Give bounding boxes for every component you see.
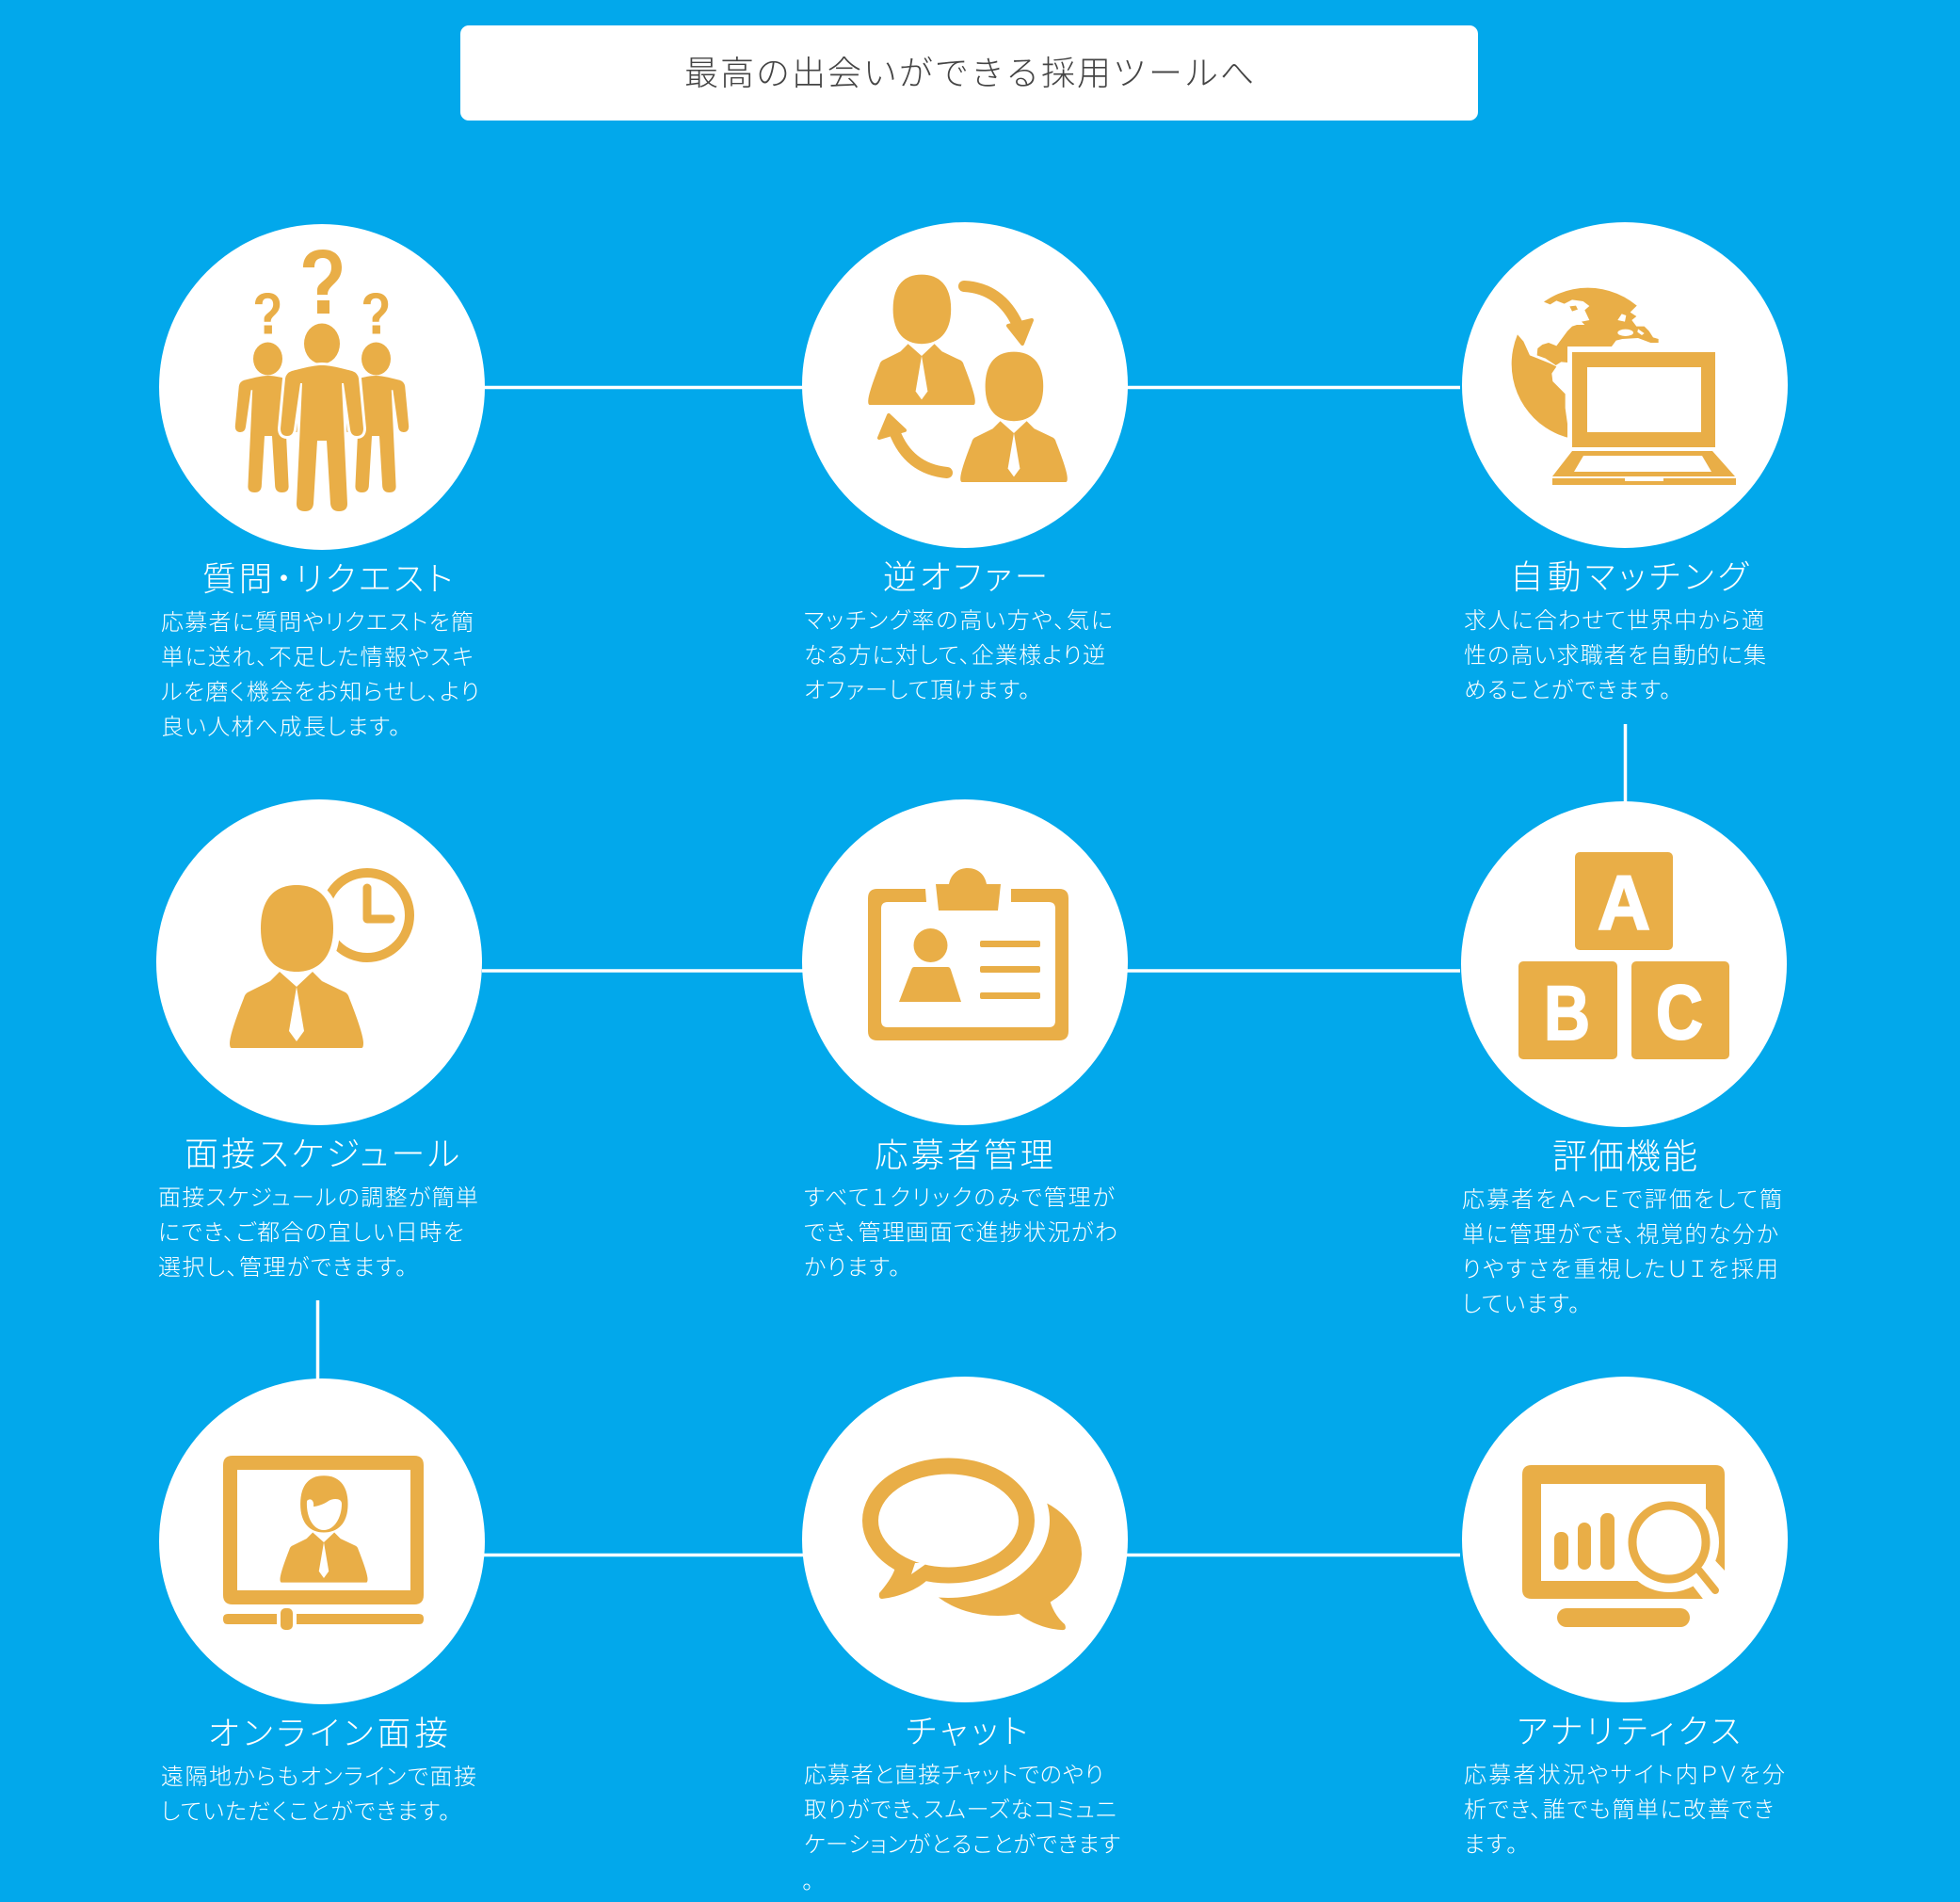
panel: オンライン面接 <box>159 1378 485 1825</box>
panel: 応募者管理 <box>802 799 1128 1281</box>
circle <box>802 222 1128 548</box>
panel: アナリティクス <box>1462 1377 1788 1858</box>
description: でき、管理画面で進捗状況がわ <box>804 1220 1117 1246</box>
heading: オンライン面接 <box>208 1715 448 1752</box>
description: 応募者に質問やリクエストを簡 <box>161 610 474 636</box>
connector lines <box>318 388 1625 1555</box>
icon: ABC blocks <box>1518 852 1729 1059</box>
description <box>802 1763 1120 1894</box>
description: かります。 <box>804 1255 900 1281</box>
heading: 自動マッチング <box>1510 558 1749 596</box>
icon: speech bubbles <box>846 1443 1082 1630</box>
description: ます。 <box>1464 1832 1518 1858</box>
description: 遠隔地からもオンラインで面接 <box>161 1765 476 1790</box>
description: りやすさを重視したＵＩを採用 <box>1462 1257 1778 1282</box>
description: 応募者と直接チャットでのやり <box>804 1763 1103 1788</box>
description: ルを磨く機会をお知らせし、より <box>161 680 479 705</box>
description: 取りができ、スムーズなコミュニ <box>804 1797 1117 1823</box>
icon: three people with question marks <box>235 250 409 511</box>
circle <box>1461 801 1787 1127</box>
panel: 逆オファー <box>802 222 1128 703</box>
description: 性の高い求職者を自動的に集 <box>1464 643 1766 669</box>
icon: two businesspeople exchanging <box>868 275 1068 482</box>
description: なる方に対して、企業様より逆 <box>804 643 1105 669</box>
heading: 応募者管理 <box>875 1136 1053 1174</box>
description <box>161 610 479 740</box>
icon: person and clock <box>230 873 410 1048</box>
description: すべて１クリックのみで管理が <box>804 1185 1115 1211</box>
description: 応募者状況やサイト内ＰＶを分 <box>1464 1763 1785 1788</box>
heading: アナリティクス <box>1517 1713 1741 1750</box>
description <box>158 1185 478 1281</box>
description <box>804 608 1113 703</box>
icon: ABC blocks: C <box>1656 970 1703 1056</box>
description: 。 <box>802 1869 813 1894</box>
title banner <box>460 25 1478 121</box>
heading: 評価機能 <box>1552 1137 1697 1176</box>
panel: 評価機能 <box>1461 801 1787 1317</box>
heading: チャット <box>906 1713 1028 1750</box>
description: 析でき、誰でも簡単に改善でき <box>1464 1797 1774 1823</box>
circle <box>159 1378 485 1704</box>
title banner: 最高の出会いができる採用ツールへ <box>684 54 1254 92</box>
description <box>804 1185 1117 1281</box>
description: していただくことができます。 <box>161 1799 450 1825</box>
description: 求人に合わせて世界中から適 <box>1464 608 1764 634</box>
panel: 面接スケジュール <box>156 799 482 1281</box>
description: 単に管理ができ、視覚的な分か <box>1462 1222 1778 1248</box>
description: 応募者をＡ～Ｅで評価をして簡 <box>1462 1187 1782 1213</box>
circle <box>1462 222 1788 548</box>
heading: 逆オファー <box>883 558 1048 596</box>
description <box>1462 1187 1782 1317</box>
description <box>1464 1763 1785 1858</box>
icon: video interview monitor <box>223 1456 424 1630</box>
icon: ABC blocks: B <box>1544 971 1590 1056</box>
description: めることができます。 <box>1464 678 1671 703</box>
circle <box>1462 1377 1788 1702</box>
panel: 自動マッチング <box>1462 222 1788 703</box>
description: しています。 <box>1462 1292 1580 1317</box>
description: 単に送れ、不足した情報やスキ <box>161 645 474 670</box>
description: ケーションがとることができます <box>804 1832 1120 1858</box>
description <box>1464 608 1766 703</box>
panel: チャット <box>802 1377 1128 1894</box>
icon: globe and laptop <box>1503 285 1736 485</box>
circle <box>156 799 482 1125</box>
heading: 質問・リクエスト <box>202 560 453 598</box>
icon: ABC blocks: A <box>1598 861 1650 946</box>
description: オファーして頂けます。 <box>804 678 1030 703</box>
icon: monitor with magnifier <box>1522 1465 1725 1627</box>
description: 面接スケジュールの調整が簡単 <box>158 1185 478 1211</box>
description: 選択し、管理ができます。 <box>158 1255 407 1281</box>
description: マッチング率の高い方や、気に <box>804 608 1113 634</box>
description: にでき、ご都合の宜しい日時を <box>158 1220 464 1246</box>
circle <box>802 799 1128 1125</box>
panel: 質問・リクエスト <box>159 224 485 740</box>
description: 良い人材へ成長します。 <box>161 715 400 740</box>
description <box>161 1765 476 1825</box>
circle <box>802 1377 1128 1702</box>
icon: ID badge <box>868 868 1068 1040</box>
heading: 面接スケジュール <box>185 1135 459 1173</box>
circle <box>159 224 485 550</box>
